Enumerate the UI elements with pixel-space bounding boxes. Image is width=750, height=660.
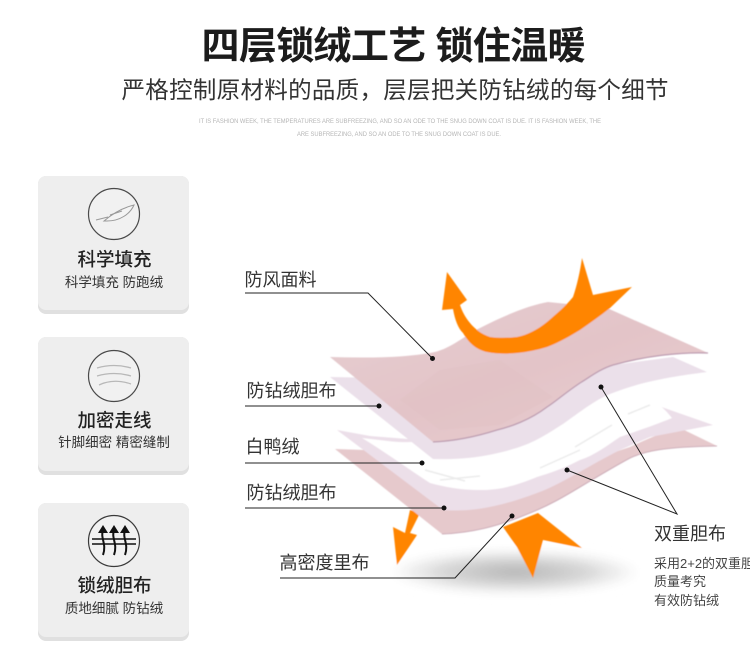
layer: lining 4 <box>335 428 717 534</box>
card subtitle: 科学填充 防跑绒 <box>65 275 164 290</box>
fold <box>400 360 553 430</box>
callout dots <box>376 356 604 518</box>
small English caption: IT IS FASHION WEEK, THE TEMPERATURES ARE SUBFREEZING, AND SO AN ODE TO THE SNUG DOWN COAT IS DUE. IT IS FASHION WEEK, THE <box>199 118 602 125</box>
card subtitle: 质地细腻 防钻绒 <box>65 601 164 616</box>
label: 白鸭绒: 白鸭绒 <box>246 437 300 457</box>
down fibres <box>425 405 650 481</box>
panel: 科学填充 <box>38 176 189 314</box>
arrow: bottom left <box>393 510 420 565</box>
arrow: bottom right <box>503 513 582 578</box>
panel: 加密走线 <box>38 337 189 475</box>
callout lines <box>245 293 677 578</box>
callout: 双重胆布: 双重胆布 <box>654 524 726 544</box>
small English caption <box>199 118 602 138</box>
icon: feather <box>88 188 140 240</box>
layer: white down <box>362 395 672 490</box>
layer: lining 2 <box>330 357 707 459</box>
callout: 双重胆布 <box>654 524 750 608</box>
label: 防钻绒胆布 lower: 防钻绒胆布 <box>246 483 336 503</box>
callout: 双重胆布: 有效防钻绒 <box>654 593 719 608</box>
small English caption: ARE SUBFREEZING, AND SO AN ODE TO THE SNUG DOWN COAT IS DUE. <box>297 131 501 138</box>
panel: 锁绒胆布 <box>38 503 189 641</box>
diagram: fabric layers <box>330 258 717 594</box>
label: 高密度里布: 高密度里布 <box>280 553 370 573</box>
callout: 双重胆布: 质量考究 <box>654 574 706 589</box>
ground shadow <box>390 550 640 594</box>
icon: stitching lines <box>88 350 140 402</box>
card subtitle: 针脚细密 精密缝制 <box>58 434 170 450</box>
title: 四层锁绒工艺 锁住温暖 <box>202 26 586 68</box>
layer edge: bottom fabric <box>442 446 717 534</box>
card title: 科学填充 <box>77 249 152 270</box>
layer: lavender under down <box>337 403 713 510</box>
card title: 加密走线 <box>77 410 152 431</box>
arrow: top <box>442 258 632 354</box>
layer: top fabric <box>330 302 708 442</box>
card title: 锁绒胆布 <box>77 575 152 596</box>
layer edge: top fabric <box>433 353 708 442</box>
subtitle: 严格控制原材料的品质，层层把关防钻绒的每个细节 <box>122 77 668 103</box>
label: 防风面料: 防风面料 <box>244 270 316 290</box>
icon: locked fibres <box>88 516 140 566</box>
label: 防钻绒胆布 upper: 防钻绒胆布 <box>246 381 336 401</box>
